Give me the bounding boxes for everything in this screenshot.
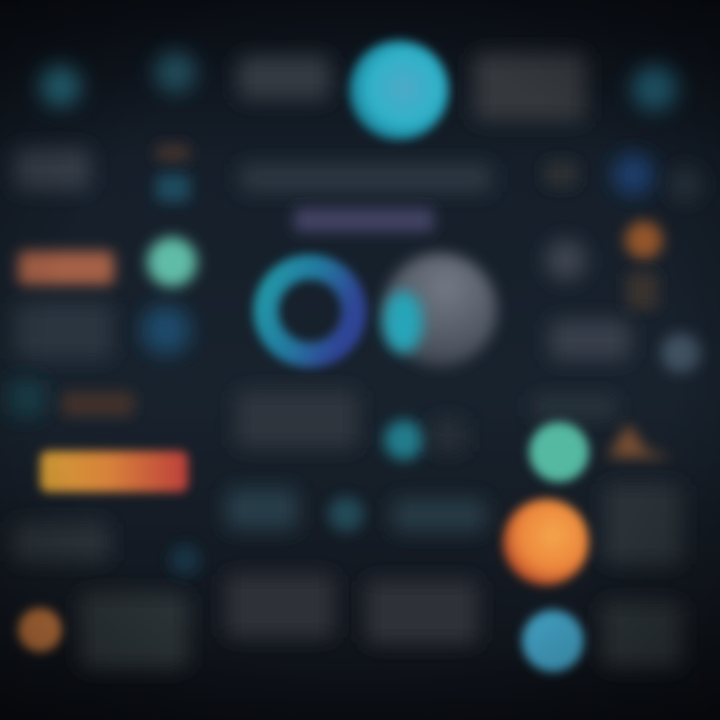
text block: right grey three bbox=[602, 602, 682, 668]
text block: rust small label bbox=[62, 392, 134, 416]
panel: right column bbox=[503, 153, 703, 672]
icon: small orange dot bbox=[18, 608, 62, 652]
icon: blue circle bottom bbox=[522, 610, 584, 672]
icon: blue dot right bbox=[613, 153, 655, 195]
icon: orange mark beside mint bbox=[608, 423, 674, 458]
icon: small brown mark bbox=[156, 144, 190, 162]
text block: bottom centre right bbox=[366, 580, 478, 644]
text block: upper grey right bbox=[532, 396, 616, 418]
chart: grey sphere bbox=[383, 253, 497, 367]
text block: right grey two bbox=[604, 484, 682, 564]
icon: small teal mark bbox=[156, 174, 190, 202]
icon: large cyan circle bbox=[349, 40, 449, 140]
text block: centre grey one bbox=[236, 390, 358, 448]
icon: top second teal dot bbox=[154, 51, 196, 93]
icon: top left teal dot bbox=[39, 65, 81, 107]
text block: top left grey bbox=[238, 56, 330, 100]
icon: teal dot bbox=[384, 420, 424, 460]
icon: grey dot mid right bbox=[545, 239, 587, 281]
text block: left grey three bbox=[13, 522, 109, 562]
icon: large orange circle bbox=[503, 499, 589, 585]
icon: rust mark below bbox=[626, 272, 658, 310]
icon: mint circle right bbox=[529, 422, 589, 482]
panel: left column bbox=[8, 144, 201, 669]
chart: donut ring bbox=[266, 267, 354, 355]
text block: dark teal two bbox=[392, 498, 486, 532]
icon: dark blue dot bbox=[169, 544, 201, 576]
icon: grey blue dot bbox=[661, 333, 701, 373]
text block: left grey one bbox=[14, 148, 90, 190]
text block: bottom centre left bbox=[226, 574, 334, 638]
text block: right grey one bbox=[550, 320, 630, 360]
panel: centre bbox=[226, 164, 497, 644]
heading: centre grey line bbox=[240, 164, 492, 192]
bar: orange label bbox=[18, 251, 114, 285]
icon: dark teal blob bbox=[8, 380, 44, 416]
icon: top right teal dot bbox=[632, 65, 678, 111]
icon: mint circle bbox=[147, 237, 197, 287]
bar: gradient heat bar bbox=[40, 451, 188, 492]
chart: cyan segment bbox=[383, 291, 423, 353]
heading: purple sub line bbox=[294, 208, 434, 232]
text block: left grey two bbox=[14, 303, 112, 359]
text block: dark teal one bbox=[226, 488, 298, 530]
text block: top right grey bbox=[474, 53, 586, 121]
icon: orange mark right bbox=[625, 221, 663, 259]
icon: grey dot right bbox=[669, 167, 703, 201]
icon: blue blob bbox=[141, 305, 191, 355]
text block: bottom left grey bbox=[80, 593, 188, 669]
text block: beside teal dot bbox=[430, 418, 466, 452]
icon: dark teal dot bbox=[328, 496, 364, 532]
icon: small brown mark right bbox=[544, 160, 578, 188]
panel: top row bbox=[39, 40, 678, 140]
